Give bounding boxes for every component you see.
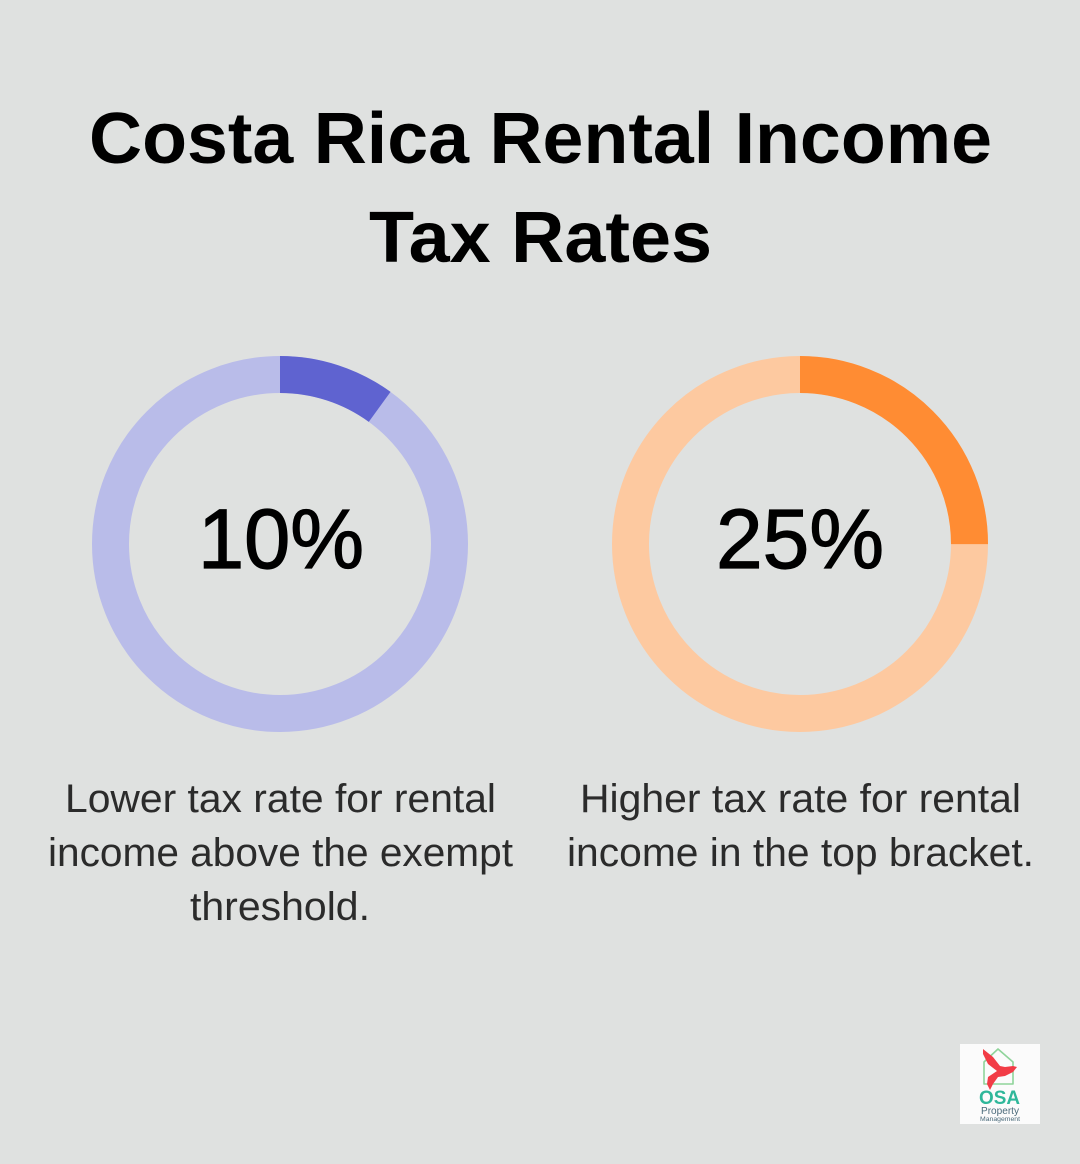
donut chart: 10% [110,374,450,714]
value: 10%: 10% [198,492,364,586]
icon: red bird [983,1049,1017,1090]
description: 10% [48,777,513,929]
icon: house outline [984,1049,1013,1084]
title: Costa Rica Rental Income [89,99,992,179]
title [89,99,992,278]
description: 10%: income above the exempt [48,831,513,875]
value: 25%: 25% [716,492,884,586]
description: 25%: income in the top bracket. [567,831,1034,875]
description: 10%: Lower tax rate for rental [65,777,496,821]
description: 25% [567,777,1034,875]
logo subtitle: Property [981,1106,1019,1117]
logo: OSA Property Management [960,1044,1040,1124]
donut chart: 25% [630,374,970,714]
panel: 10% rate [48,374,513,929]
description: 10%: threshold. [190,885,370,929]
logo tagline: Management [980,1116,1020,1123]
logo wordmark: OSA [979,1088,1020,1109]
panel: 25% rate [567,374,1034,875]
title: Tax Rates [369,198,712,278]
description: 25%: Higher tax rate for rental [580,777,1021,821]
